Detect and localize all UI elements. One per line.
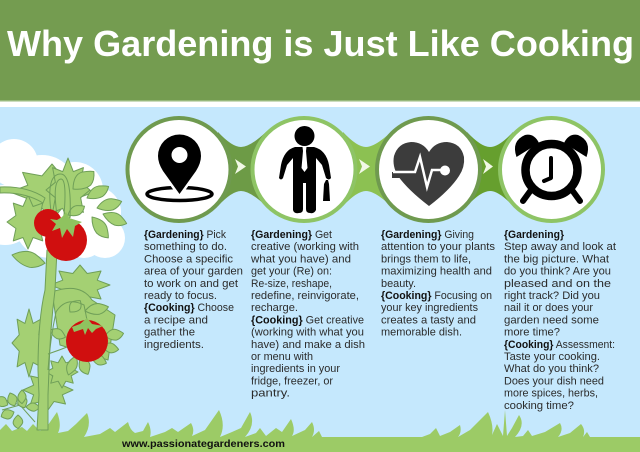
text column 4: pleased and on the [504,278,611,290]
text column 1: a recipe and [144,314,208,326]
text column 3 [381,229,496,339]
connector 2-3 [343,132,391,206]
text column 4: {Cooking} Assessment: [504,339,615,351]
step 2 circle: businessman [252,118,356,221]
connector 3-4 [467,132,513,206]
tomato: small [34,209,62,237]
text column 1: something to do. [144,241,227,253]
text column 4: Step away and look at [504,241,616,253]
text column 2: {Cooking} Get creative [251,314,364,326]
icon: man with briefcase [279,126,331,213]
arrow 2 [359,159,370,174]
text column 2: ingredients in your [251,363,340,375]
text column 1: {Cooking} Choose [144,302,234,314]
text column 1 [144,229,243,351]
text column 2: have) and make a dish [251,339,365,351]
text column 3: your key ingredients [381,302,478,314]
text column 3: {Cooking} Focusing on [381,290,492,302]
text column 4: cooking time? [504,400,574,412]
lower foliage [12,265,124,410]
text column 4 [504,229,616,412]
text column 3: creates a tasty and [381,314,476,326]
icon: map pin [147,135,212,200]
step 1 circle: location pin [128,118,230,221]
text column 4: What do you think? [504,363,599,375]
text column 2: pantry. [251,388,290,400]
icon: alarm clock [515,135,588,201]
text column 4: do you think? Are you [504,266,611,278]
text column 4: garden need some [504,314,599,326]
text column 2: Re-size, reshape, [251,278,332,290]
connector 1-2 [218,132,266,206]
text column 4: nail it or does your [504,302,593,314]
text column 2: creative (working with [251,241,359,253]
title: Why Gardening is Just Like Cooking [7,23,634,64]
text column 2 [250,229,365,400]
text column 1: area of your garden [144,266,243,278]
text column 4: Does your dish need [504,375,604,387]
text column 2: fridge, freezer, or [251,375,333,387]
website url: www.passionategardeners.com [121,438,285,450]
arrow 3 [483,159,493,174]
text column 1: gather the [144,327,195,339]
cloud [0,139,125,258]
text column 3: maximizing health and [381,266,492,278]
text column 2: what you have) and [250,253,351,265]
text column 3: attention to your plants [381,241,496,253]
tomato: lower [66,320,108,362]
tomato calyxes [50,212,103,335]
small bottom-left leaves [0,390,40,429]
text column 1: to work on and get [144,278,238,290]
text column 1: ready to focus. [144,290,217,302]
ground with grass [0,410,640,452]
text column 2: or menu with [251,351,313,363]
text column 2: {Gardening} Get [251,229,332,241]
text column 1: ingredients. [144,339,204,351]
sky background [0,107,640,452]
tomato: large top [45,219,87,261]
text column 1: {Gardening} Pick [144,229,226,241]
upper leaf cluster [7,158,129,271]
text column 4: Taste your cooking. [504,351,600,363]
arrow 1 [235,159,246,174]
text column 4: {Gardening} [504,229,565,241]
text column 4: right track? Did you [504,290,600,302]
text column 2: redefine, reinvigorate, [251,290,359,302]
text column 4: the big picture. What [504,253,609,265]
icon: heartbeat [392,142,464,206]
text column 3: memorable dish. [381,327,462,339]
text column 4: more time? [504,327,560,339]
text column 4: more spices, herbs, [504,388,598,400]
stems [0,174,87,430]
header underline [0,100,640,102]
step connectors [218,132,513,206]
text column 2: (working with what you [251,327,364,339]
text column 2: get your (Re) on: [251,266,332,278]
header band [0,0,640,100]
tomato plant [0,158,129,430]
text column 3: beauty. [381,278,416,290]
text column 1: Choose a specific [144,253,234,265]
step 3 circle: heart [377,118,480,221]
text column 2: recharge. [251,302,298,314]
text column 3: {Gardening} Giving [381,229,474,241]
step 4 circle: alarm clock [500,118,603,221]
text column 3: brings them to life, [381,253,471,265]
